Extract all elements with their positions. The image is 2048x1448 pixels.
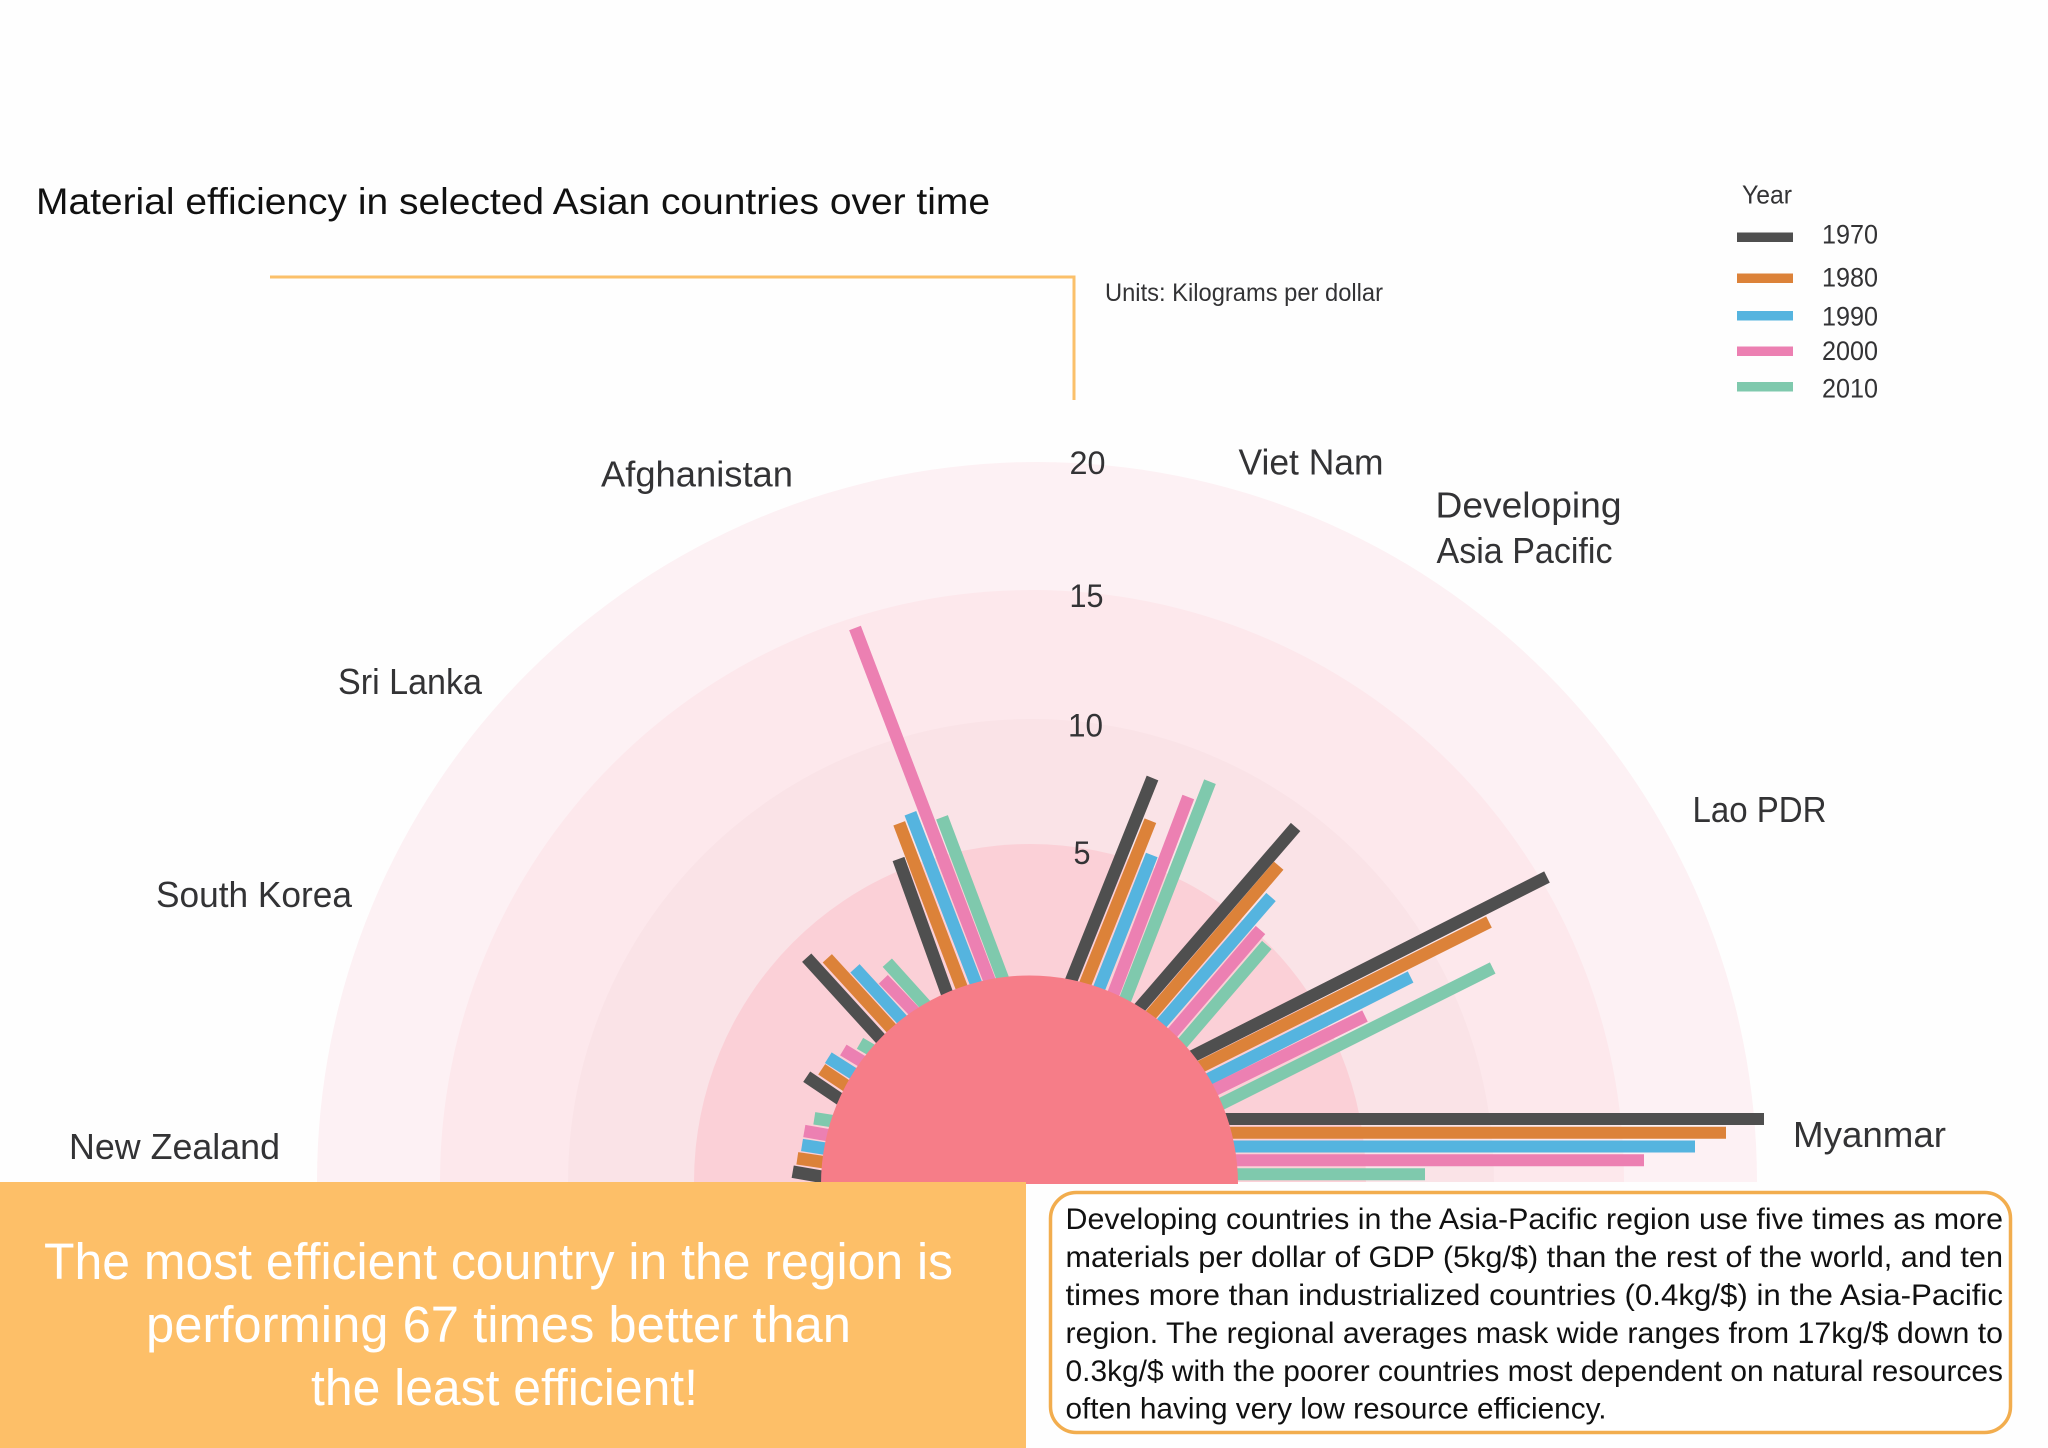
country labels: Sri Lanka <box>338 661 483 702</box>
legend item 1980: 1980 <box>1822 262 1878 292</box>
explanatory paragraph: materials per dollar of GDP (5kg/$) than the rest of the world, and ten <box>1066 1241 2003 1274</box>
axis labels: 10 <box>1068 708 1103 744</box>
country labels: Asia Pacific <box>1436 530 1612 571</box>
callout headline: the least efficient! <box>311 1359 698 1416</box>
legend item 1990: 1990 <box>1822 302 1878 332</box>
legend item 1970: 1970 <box>1822 220 1878 250</box>
bars: Developing Asia Pacific <box>1131 827 1296 1054</box>
country labels <box>69 442 1946 1167</box>
callout headline: The most efficient country in the region is <box>44 1233 953 1290</box>
explanatory paragraph: 0.3kg/$ with the poorer countries most dependent on natural resources <box>1066 1355 2003 1388</box>
country labels: Lao PDR <box>1692 789 1826 830</box>
axis labels: 20 <box>1070 445 1106 481</box>
bars: Viet Nam <box>1066 778 1210 1011</box>
explanatory paragraph: region. The regional averages mask wide ranges from 17kg/$ down to <box>1066 1317 2003 1350</box>
centre semicircle <box>821 976 1238 1184</box>
explanatory paragraph <box>1066 1203 2003 1426</box>
radial chart <box>69 442 1946 1184</box>
explanatory paragraph: often having very low resource efficiency. <box>1066 1392 1606 1426</box>
bars: New Zealand <box>793 1118 846 1179</box>
scale rings <box>317 462 1757 1182</box>
country labels: Viet Nam <box>1238 442 1384 482</box>
bars: South Korea <box>807 1043 884 1106</box>
panel: orange callout <box>0 1182 1026 1448</box>
axis labels: 15 <box>1070 578 1104 614</box>
bars: Sri Lanka <box>807 958 933 1048</box>
units note: Units: Kilograms per dollar <box>1105 279 1383 307</box>
country labels: Developing <box>1436 484 1622 526</box>
explanatory paragraph: times more than industrialized countries (0.4kg/$) in the Asia-Pacific <box>1066 1279 2003 1312</box>
callout headline <box>44 1233 953 1416</box>
country labels: Afghanistan <box>601 454 793 494</box>
country labels: New Zealand <box>69 1126 280 1167</box>
legend item 1980 <box>1737 262 1878 292</box>
legend item 2000: 2000 <box>1822 336 1878 366</box>
bracket line <box>270 277 1074 400</box>
legend <box>1737 180 1878 404</box>
bars: Afghanistan <box>855 628 1007 1007</box>
panel: explanatory text box <box>1050 1192 2010 1432</box>
axis labels <box>1068 445 1106 871</box>
legend item 1990 <box>1737 302 1878 332</box>
bars: Myanmar <box>1200 1119 1764 1174</box>
axis labels: 5 <box>1074 835 1090 871</box>
callout headline: performing 67 times better than <box>146 1296 851 1353</box>
country labels: South Korea <box>156 874 353 915</box>
explanatory paragraph: Developing countries in the Asia-Pacific region use five times as more <box>1066 1203 2003 1236</box>
country labels: Myanmar <box>1793 1114 1946 1155</box>
legend item 2010: 2010 <box>1822 374 1878 404</box>
legend item 2010 <box>1737 374 1878 404</box>
legend item 2000 <box>1737 336 1878 366</box>
legend title: Year <box>1742 180 1792 210</box>
bars: Lao PDR <box>1182 877 1547 1110</box>
title: Material efficiency in selected Asian countries over time <box>36 181 990 222</box>
legend item 1970 <box>1737 220 1878 250</box>
